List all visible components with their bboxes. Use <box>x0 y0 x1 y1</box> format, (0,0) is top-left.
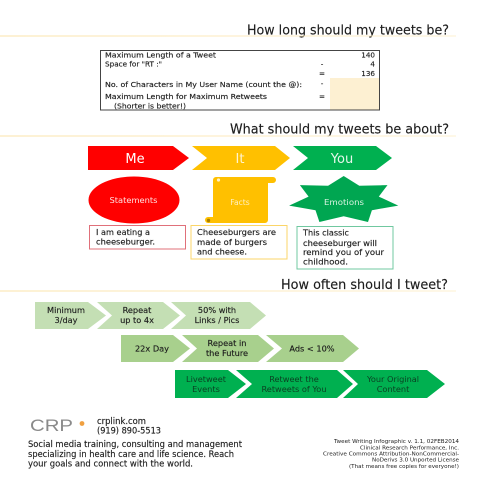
chevron row 2: Repeat in <box>208 338 246 348</box>
chevron: It <box>192 146 290 170</box>
panel: tweet length table: Maximum Length for Maximum Retweets <box>105 92 267 101</box>
text box: emotion example <box>297 226 393 269</box>
chevron row 3: Events <box>192 384 220 394</box>
chevron: It: It <box>236 152 244 167</box>
chevron row 2: 22x Day <box>135 344 169 354</box>
chevron row 1: Repeat <box>123 305 152 315</box>
chevron: You: You <box>330 152 353 167</box>
panel: tweet length table: 140 <box>361 50 375 60</box>
chevron row 1 <box>35 302 266 329</box>
chevron row 2: the Future <box>206 348 248 358</box>
shape: Statements ellipse: Statements <box>110 196 158 205</box>
license note: Clinical Research Performance, Inc. <box>360 446 459 452</box>
chevron row 3: Retweet the <box>269 374 319 384</box>
chevron row 3: Livetweet <box>186 374 227 384</box>
shape: Emotions star <box>289 176 398 222</box>
shape: Facts scroll: Facts <box>230 198 250 207</box>
chevron row 3: Retweets of You <box>261 384 327 394</box>
panel: tweet length table: Space for "RT :" <box>105 60 162 68</box>
chevron row 2 <box>121 335 359 362</box>
contact details <box>97 416 161 436</box>
text box: fact example: Cheeseburgers are <box>197 228 276 237</box>
panel: tweet length table: (Shorter is better!) <box>114 102 186 110</box>
chevron row 1: up to 4x <box>120 315 154 325</box>
chevron row 1: Minimum <box>47 305 85 315</box>
chevron row 1: 3/day <box>54 315 78 325</box>
license note: NoDerivs 3.0 Unported License <box>372 458 459 464</box>
panel: tweet length table: 4 <box>370 60 375 68</box>
license note <box>323 439 460 470</box>
chevron: Me: Me <box>125 152 145 167</box>
text box: fact example <box>191 226 287 259</box>
chevron row 3: Content <box>377 384 410 394</box>
chevron row 3 <box>175 370 445 398</box>
chevron row 1: 50% with <box>198 305 236 315</box>
text box: fact example: and cheese. <box>197 248 247 257</box>
text box: emotion example: cheeseburger will <box>303 239 377 248</box>
text box: statement example: cheeseburger. <box>96 238 155 246</box>
text box: statement example <box>90 226 186 249</box>
shape: Statements ellipse <box>88 176 180 224</box>
panel: tweet length table: = <box>319 69 325 78</box>
contact details: (919) 890-5513 <box>97 426 161 436</box>
logo: CRP: CRP <box>30 417 73 435</box>
company description: specializing in health care and life science. Reach <box>28 450 234 460</box>
shape: Emotions star: Emotions <box>324 198 364 207</box>
chevron row 3: Your Original <box>366 374 419 384</box>
contact details: crplink.com <box>97 416 146 426</box>
heading: what about: What should my tweets be about? <box>230 122 449 138</box>
shape: Facts scroll <box>205 177 276 223</box>
text box: fact example: made of burgers <box>197 238 267 247</box>
heading: how long: How long should my tweets be? <box>247 22 449 38</box>
panel: tweet length table: = <box>319 92 325 101</box>
panel: tweet length table: - <box>321 60 324 68</box>
license note: Tweet Writing Infographic v. 1.1, 02FEB2014 <box>333 439 460 445</box>
text box: emotion example: remind you of your <box>303 248 385 257</box>
text box: statement example: I am eating a <box>96 228 150 237</box>
chevron row 2: Ads < 10% <box>289 344 335 354</box>
panel: tweet length table: - <box>321 79 324 88</box>
panel: tweet length table: Maximum Length of a Tweet <box>105 50 216 60</box>
panel: tweet length table: 136 <box>361 69 375 78</box>
heading: how often: How often should I tweet? <box>281 277 448 293</box>
panel: tweet length table <box>100 50 380 110</box>
text box: emotion example: childhood. <box>303 258 348 266</box>
chevron: You <box>293 146 392 170</box>
panel: tweet length table: No. of Characters in My User Name (count the @): <box>105 80 302 89</box>
company description: your goals and connect with the world. <box>28 460 193 470</box>
chevron: Me <box>88 146 189 170</box>
company description: Social media training, consulting and management <box>28 440 243 450</box>
chevron row 1: Links / Pics <box>195 315 239 325</box>
company description <box>28 440 243 470</box>
text box: emotion example: This classic <box>302 228 349 238</box>
license note: (That means free copies for everyone!) <box>349 464 459 470</box>
license note: Creative Commons Attribution-NonCommercial- <box>323 452 459 458</box>
logo: CRP <box>30 417 84 435</box>
